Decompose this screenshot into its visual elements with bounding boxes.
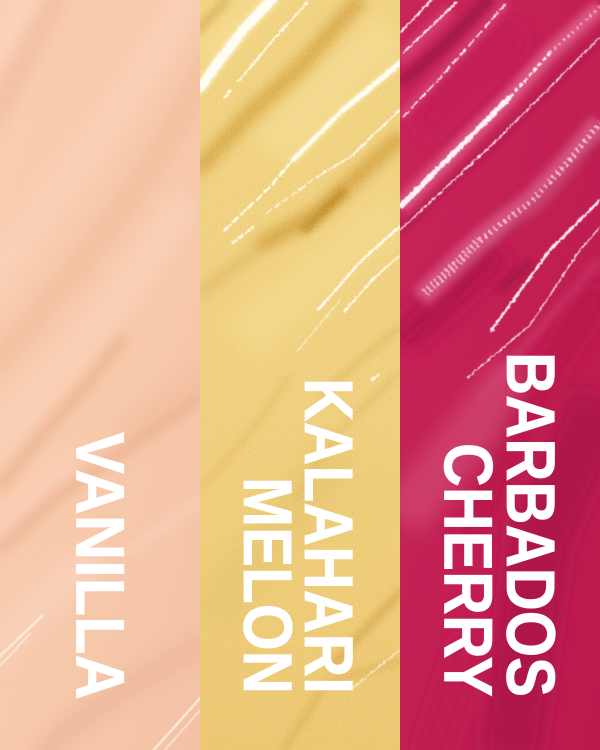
panel: kalahari melon swatch [196, 0, 404, 750]
glitter texture [200, 0, 400, 750]
label: Vanilla: VANILLA [62, 432, 138, 700]
label: Barbados Cherry [430, 352, 569, 697]
label: Kalahari Melon: KALAHARI [290, 378, 367, 694]
label: Kalahari Melon [229, 378, 367, 694]
label: Kalahari Melon: MELON [229, 477, 306, 694]
panel: barbados cherry swatch [400, 0, 600, 750]
label: Barbados Cherry: BARBADOS [492, 352, 569, 697]
label: Barbados Cherry: CHERRY [430, 443, 506, 697]
panel: vanilla swatch [0, 0, 210, 750]
